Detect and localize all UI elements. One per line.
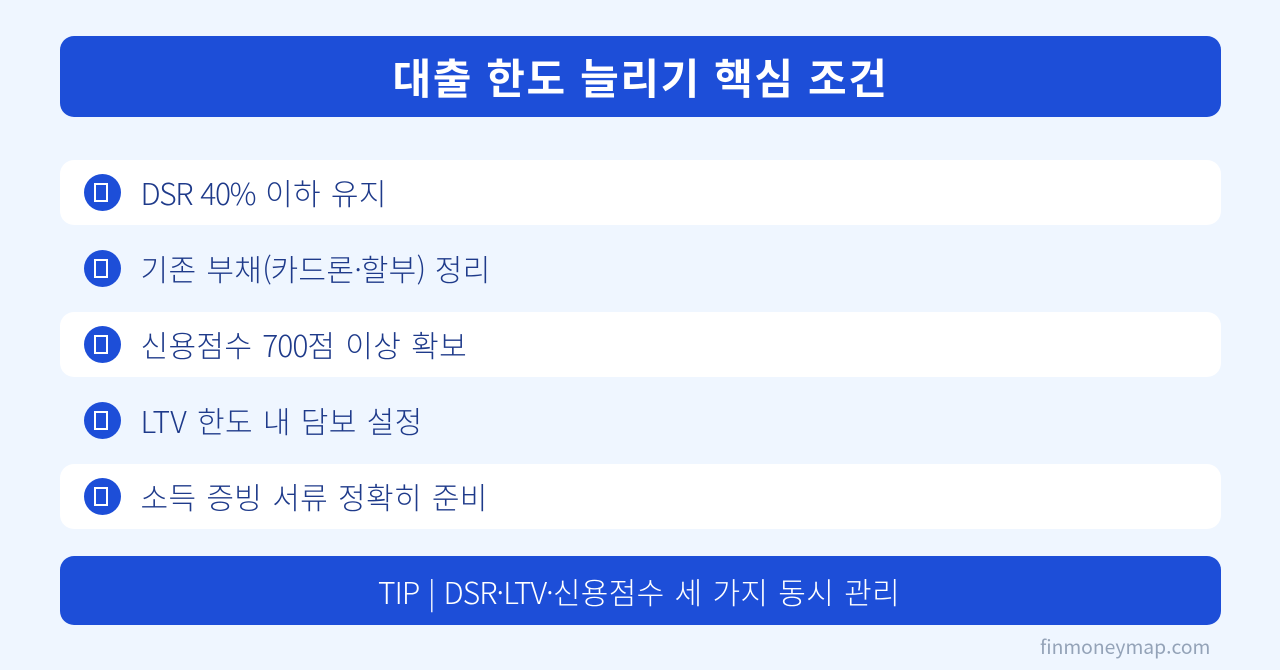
tip banner — [60, 556, 1221, 625]
icon: bullet 1 — [84, 174, 121, 211]
item 3 text: 신용점수 700점 이상 확보 — [140, 322, 467, 366]
icon: bullet 4 — [84, 402, 121, 439]
item 3: credit score — [60, 312, 1221, 377]
item 5: income documents — [60, 464, 1221, 529]
item 5 text: 소득 증빙 서류 정확히 준비 — [140, 474, 488, 518]
tip banner: TIP | DSR·LTV·신용점수 세 가지 동시 관리 — [378, 569, 900, 613]
icon: bullet 2 — [84, 250, 121, 287]
icon: bullet 3 — [84, 326, 121, 363]
item 2 text: 기존 부채(카드론·할부) 정리 — [140, 246, 491, 290]
item 1: DSR — [60, 160, 1221, 225]
item 4: LTV — [84, 398, 423, 442]
icon: bullet 5 — [84, 478, 121, 515]
item 1 text: DSR 40% 이하 유지 — [140, 170, 387, 214]
title banner: 대출 한도 늘리기 핵심 조건 — [392, 46, 889, 107]
title banner — [60, 36, 1221, 117]
item 2: debt — [84, 246, 491, 290]
item 4 text: LTV 한도 내 담보 설정 — [140, 398, 423, 442]
footer source: finmoneymap.com — [1040, 632, 1210, 660]
